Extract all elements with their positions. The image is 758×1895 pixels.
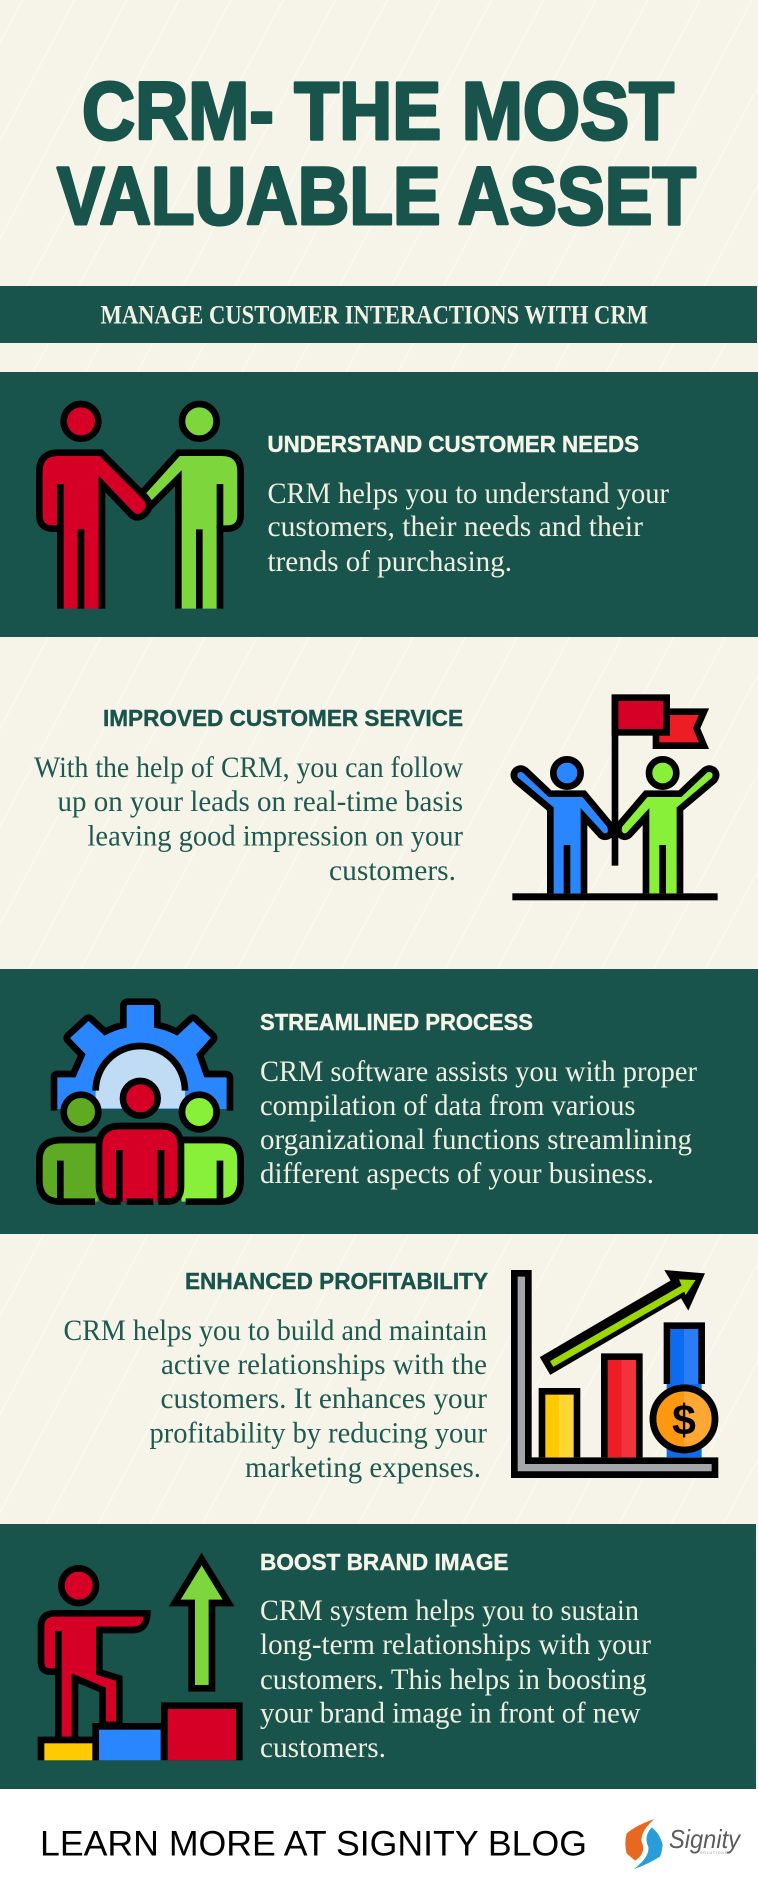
title: CRM- THE MOST: [82, 66, 674, 157]
body text: profitability by reducing your: [150, 1416, 487, 1450]
icon: team with flag: [512, 695, 718, 900]
panel: boost brand image: [0, 1524, 756, 1789]
body text: customers. It enhances your: [160, 1382, 487, 1415]
body text: [64, 1314, 487, 1484]
body text: different aspects of your business.: [260, 1157, 654, 1190]
body text: With the help of CRM, you can follow: [34, 751, 463, 784]
body text: up on your leads on real-time basis: [58, 785, 463, 818]
body text: your brand image in front of new: [260, 1696, 641, 1730]
panel: streamlined process: [0, 969, 758, 1234]
body text: active relationships with the: [161, 1348, 487, 1381]
heading: BOOST BRAND IMAGE: [260, 1549, 508, 1575]
footer: [0, 1789, 758, 1895]
icon: person climbing steps with up arrow: [38, 1559, 243, 1760]
body text: CRM helps you to build and maintain: [64, 1314, 487, 1347]
body text: leaving good impression on your: [88, 820, 463, 852]
logo: Signity: SOLUTIONS: [700, 1851, 728, 1855]
title: [57, 66, 696, 242]
body text: [260, 1594, 651, 1764]
subtitle banner: MANAGE CUSTOMER INTERACTIONS WITH CRM: [100, 300, 648, 330]
body text: compilation of data from various: [260, 1089, 636, 1122]
panel: improved customer service: [34, 695, 718, 900]
body text: [260, 1055, 697, 1190]
body text: CRM system helps you to sustain: [260, 1594, 639, 1627]
heading: ENHANCED PROFITABILITY: [185, 1268, 488, 1294]
icon: gear with team: [39, 1002, 241, 1202]
icon: rising bar chart with coin: [514, 1270, 715, 1475]
heading: STREAMLINED PROCESS: [260, 1009, 533, 1035]
body text: CRM software assists you with proper: [260, 1055, 697, 1088]
body text: long-term relationships with your: [260, 1628, 651, 1661]
body text: CRM helps you to understand your: [268, 477, 669, 510]
call to action text: LEARN MORE AT SIGNITY BLOG: [40, 1824, 587, 1864]
body text: customers. This helps in boosting: [260, 1663, 646, 1696]
panel: enhanced profitability: [64, 1268, 715, 1484]
body text: [268, 477, 669, 578]
body text: marketing expenses.: [245, 1451, 481, 1484]
subtitle banner: [0, 286, 757, 343]
body text: customers, their needs and their: [268, 510, 643, 543]
body text: customers.: [329, 854, 456, 887]
icon: two people shaking hands: [39, 404, 241, 609]
logo: Signity: Signity: [669, 1824, 742, 1854]
body text: customers.: [260, 1731, 386, 1764]
heading: IMPROVED CUSTOMER SERVICE: [103, 705, 463, 731]
heading: UNDERSTAND CUSTOMER NEEDS: [268, 431, 639, 457]
body text: [34, 751, 463, 887]
body text: organizational functions streamlining: [260, 1123, 692, 1156]
panel: understand customer needs: [0, 372, 758, 637]
logo: Signity: [625, 1819, 742, 1869]
body text: trends of purchasing.: [268, 545, 512, 578]
icon: rising bar chart with coin: $: [672, 1397, 696, 1445]
